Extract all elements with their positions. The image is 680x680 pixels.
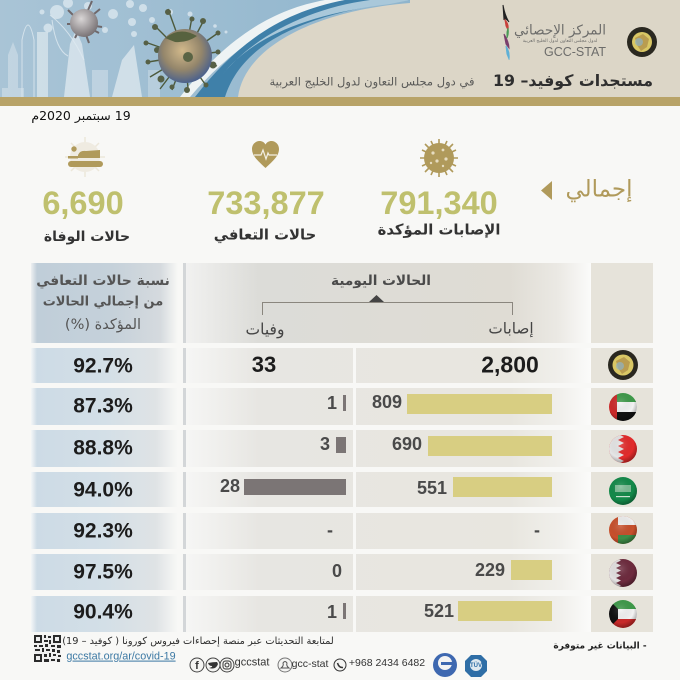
header panel: country bbox=[591, 263, 653, 343]
stat: recovered cases bbox=[207, 141, 325, 244]
case count: 521 bbox=[424, 601, 454, 621]
icon: virus bbox=[420, 139, 458, 177]
death count: 1 bbox=[327, 393, 337, 413]
icon: TUV badge bbox=[465, 655, 487, 677]
icon: GCC emblem bbox=[608, 350, 638, 380]
death count: 0 bbox=[332, 561, 342, 581]
recovery rate: 94.0% bbox=[73, 478, 133, 502]
death count: 28 bbox=[220, 476, 240, 496]
heading: total bbox=[541, 176, 633, 202]
row: UAE bbox=[32, 388, 653, 425]
virus globe bbox=[144, 9, 220, 93]
flag: Bahrain bbox=[609, 435, 637, 463]
case bar bbox=[428, 436, 552, 456]
recovery rate line 1: نسبة حالات التعافي bbox=[36, 273, 170, 289]
grey virus bbox=[67, 1, 102, 43]
row: Qatar bbox=[32, 554, 653, 590]
recovery rate line 3: المؤكدة (%) bbox=[65, 317, 141, 333]
header panel: daily cases bbox=[186, 263, 591, 343]
gold band bbox=[0, 97, 680, 106]
recovery rate: 87.3% bbox=[73, 394, 133, 418]
recovery rate line 2: من إجمالي الحالات bbox=[43, 294, 163, 310]
case bar bbox=[458, 601, 552, 621]
death bar bbox=[244, 479, 346, 495]
case count: 551 bbox=[417, 478, 447, 498]
icon: twitter bbox=[206, 658, 220, 672]
recovery rate: 92.3% bbox=[73, 520, 133, 542]
recovered label: حالات التعافي bbox=[214, 227, 316, 244]
death count: 1 bbox=[327, 602, 337, 622]
icon: facebook bbox=[190, 658, 204, 672]
footnote: data unavailable: - البيانات غير متوفرة bbox=[553, 642, 647, 652]
flag: Saudi Arabia bbox=[609, 477, 637, 505]
beige panel bbox=[238, 0, 680, 97]
social icons bbox=[190, 658, 346, 672]
snapchat handle: gcc-stat bbox=[292, 658, 328, 670]
title: مستجدات كوفيد– 19 bbox=[493, 71, 653, 90]
recovered total: 733,877 bbox=[207, 185, 325, 221]
logo latin name: GCC-STAT bbox=[544, 45, 606, 59]
icon: snapchat bbox=[278, 658, 292, 672]
icon: certification seal bbox=[433, 653, 457, 677]
row: Saudi Arabia bbox=[32, 472, 653, 507]
link: gccstat.org/ar/covid-19 bbox=[66, 651, 176, 663]
case count: 229 bbox=[475, 560, 505, 580]
table header bbox=[31, 263, 653, 343]
icon: heart bbox=[252, 141, 279, 168]
death bar bbox=[343, 395, 346, 411]
logo: GCC-STAT bbox=[502, 4, 606, 60]
deaths total: 6,690 bbox=[42, 185, 124, 221]
bracket bbox=[262, 295, 513, 315]
case bar bbox=[407, 394, 552, 414]
recovery rate: 88.8% bbox=[73, 436, 133, 460]
flag: Qatar bbox=[609, 559, 637, 587]
row: Oman bbox=[32, 513, 653, 549]
header banner bbox=[0, 0, 680, 106]
arrow: total marker bbox=[541, 181, 552, 200]
icon: whatsapp bbox=[334, 659, 346, 671]
confirmed total: 791,340 bbox=[380, 185, 498, 221]
flag: UAE bbox=[609, 393, 637, 421]
flag: Kuwait bbox=[609, 600, 637, 628]
death bar bbox=[343, 603, 346, 619]
case bar bbox=[511, 560, 552, 580]
instagram handle: gccstat bbox=[235, 656, 269, 668]
logo ribbon bbox=[502, 4, 510, 60]
cases: 2,800 bbox=[481, 352, 539, 378]
recovery rate: 97.5% bbox=[73, 560, 133, 584]
death bar bbox=[336, 437, 346, 453]
QR code bbox=[34, 635, 61, 662]
daily cases heading: الحالات اليومية bbox=[331, 273, 431, 289]
logo arabic tagline: لدول مجلس التعاون لدول الخليج العربية bbox=[523, 39, 597, 44]
case count: 690 bbox=[392, 434, 422, 454]
case count: 809 bbox=[372, 392, 402, 412]
death count: 3 bbox=[320, 434, 330, 454]
icon: facebook: f bbox=[195, 660, 199, 672]
death count: - bbox=[327, 520, 333, 540]
row: Kuwait bbox=[32, 596, 653, 632]
header panel: recovery rate bbox=[31, 263, 178, 343]
recovery rate: 90.4% bbox=[73, 600, 133, 624]
phone number: +968 2434 6482 bbox=[349, 657, 425, 669]
subtitle: في دول مجلس التعاون لدول الخليج العربية bbox=[269, 74, 475, 88]
icon: patient in bed bbox=[65, 137, 105, 177]
icon: GCC emblem bbox=[627, 27, 657, 57]
stat: confirmed cases bbox=[378, 139, 500, 239]
deaths label: حالات الوفاة bbox=[44, 229, 130, 245]
follow-up text: لمتابعة التحديثات عبر منصة إحصاءات فيروس كورونا ( كوفيد – 19) bbox=[62, 636, 334, 647]
row: Bahrain bbox=[32, 430, 653, 467]
column label: cases: إصابات bbox=[488, 319, 534, 337]
city skyline bbox=[2, 30, 160, 97]
case count: - bbox=[534, 520, 540, 540]
icon: TUV badge: TÜV bbox=[470, 662, 482, 669]
stat: deaths bbox=[42, 137, 130, 245]
case bar bbox=[453, 477, 552, 497]
swoosh blue bbox=[195, 0, 410, 97]
date: 19 سبتمبر 2020م bbox=[31, 108, 131, 123]
light bubbles bbox=[40, 0, 228, 37]
flag: Oman bbox=[609, 516, 637, 544]
icon: instagram bbox=[220, 658, 234, 672]
logo arabic name: المركز الإحصائي bbox=[514, 22, 606, 38]
column label: deaths: وفيات bbox=[246, 320, 284, 338]
swoosh white bbox=[180, 0, 345, 97]
total label: إجمالي bbox=[565, 176, 633, 202]
deaths: 33 bbox=[252, 352, 276, 377]
row: GCC total bbox=[32, 348, 653, 383]
recovery rate: 92.7% bbox=[73, 354, 133, 378]
confirmed label: الإصابات المؤكدة bbox=[378, 222, 500, 239]
